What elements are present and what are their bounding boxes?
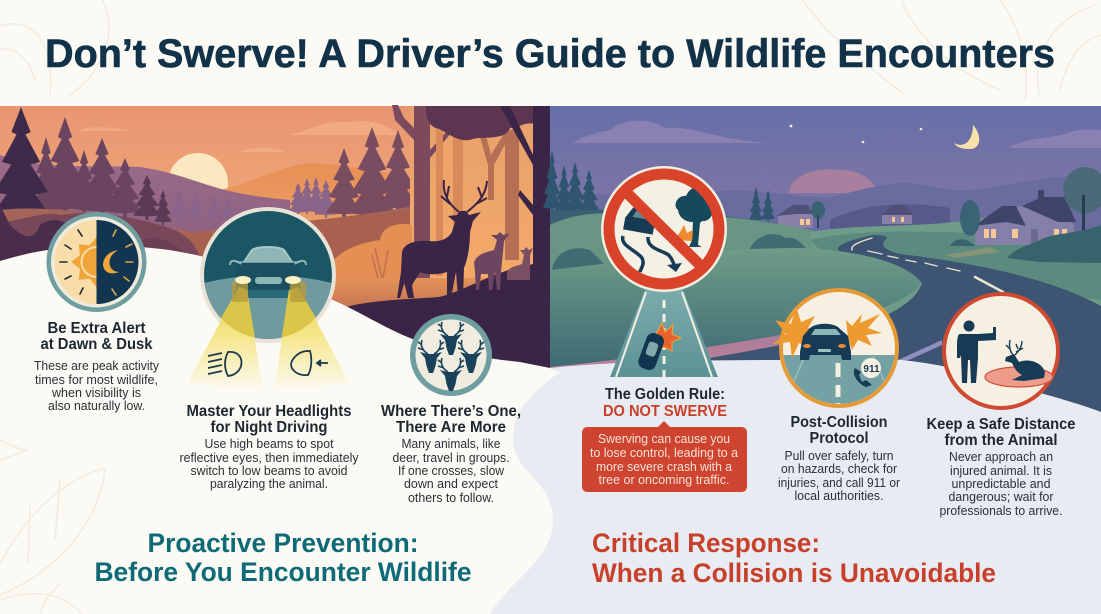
text: safe distance: professionals to arrive. (940, 503, 1062, 518)
text: dawn and dusk: also naturally low. (48, 398, 145, 413)
sun (168, 153, 228, 213)
orange hill (200, 163, 415, 240)
road edge stripe (898, 340, 942, 364)
section heading: critical response: When a Collision is Unavoidable (592, 558, 996, 588)
heading: golden rule: DO NOT SWERVE (603, 403, 727, 420)
text: post-collision: local authorities. (794, 488, 884, 503)
forest pines left (30, 117, 142, 218)
heading: groups (381, 403, 521, 436)
heading: safe distance: Keep a Safe Distance (926, 416, 1076, 433)
heading: golden rule: The Golden Rule: (605, 386, 725, 403)
stars (790, 125, 922, 143)
heading: post-collision: Protocol (810, 430, 868, 447)
explosions (773, 306, 820, 358)
text: groups: If one crosses, slow (398, 463, 505, 478)
text: post-collision (778, 448, 901, 503)
text: groups: Many animals, like (402, 436, 500, 451)
forest trees (392, 105, 452, 278)
text: groups (392, 436, 510, 505)
icon: high beam (208, 352, 242, 376)
text: post-collision: injuries, and call 911 or (778, 475, 901, 490)
icon: low beam (291, 351, 328, 375)
big house (974, 190, 1076, 245)
heading: safe distance (926, 416, 1076, 449)
heading: dawn and dusk: at Dawn & Dusk (40, 336, 153, 353)
left bush hills (0, 213, 200, 258)
big pine (0, 107, 53, 232)
text: safe distance: Never approach an (949, 449, 1053, 464)
resting deer (1005, 340, 1045, 381)
text: groups: down and expect (404, 476, 498, 491)
icon: dawn and dusk clock (46, 212, 146, 312)
tree line (550, 209, 790, 225)
heading: post-collision (790, 414, 888, 447)
text: dawn and dusk: when visibility is (51, 385, 141, 400)
text: safe distance: injured animal. It is (950, 463, 1052, 478)
distant hills (550, 177, 1101, 260)
forest pines right (326, 127, 418, 223)
panel: cream foreground left (0, 246, 560, 614)
lower hills (0, 205, 420, 300)
car (800, 324, 851, 360)
deer silhouettes (397, 180, 533, 298)
heading: golden rule (603, 386, 727, 420)
heading: dawn and dusk: Be Extra Alert (48, 320, 146, 337)
dark foreground hill (320, 262, 551, 372)
skid paths (623, 236, 675, 272)
moon (954, 125, 979, 149)
heading: headlights: Master Your Headlights (186, 403, 352, 420)
clouds (75, 121, 400, 152)
text: safe distance (940, 449, 1062, 518)
car (623, 208, 654, 235)
trees by house (960, 167, 1101, 236)
car (230, 247, 306, 298)
text: headlights: reflective eyes, then immediately (180, 450, 359, 465)
headlamp glow (945, 247, 1000, 258)
panel: dawn forest scene (0, 105, 551, 372)
beams (188, 287, 263, 392)
decorative leaves (0, 0, 1101, 100)
section heading: proactive prevention (94, 528, 472, 587)
big green hill (550, 248, 922, 367)
text: safe distance: dangerous; wait for (948, 489, 1054, 504)
panel: dusk road scene (543, 106, 1101, 425)
icon: post-collision circle: 911 (863, 364, 880, 375)
heading: post-collision: Post-Collision (790, 414, 888, 431)
icon: deer herd circle (410, 314, 492, 396)
heading: dawn and dusk (40, 320, 153, 353)
callout: swerving warning: to lose control, leading to a (590, 445, 739, 460)
bushes (750, 234, 806, 249)
tree (676, 188, 712, 247)
text: headlights: Use high beams to spot (204, 436, 334, 451)
icon: headlights circle (188, 205, 349, 392)
heading: headlights: for Night Driving (210, 419, 328, 436)
text: safe distance: unpredictable and (952, 476, 1050, 491)
text: groups: others to follow. (408, 490, 494, 505)
heading: groups: Where There’s One, (381, 403, 521, 420)
text: post-collision: Pull over safely, turn (784, 448, 894, 463)
distant pines (169, 177, 337, 220)
section heading: proactive prevention: Proactive Prevention: (148, 528, 418, 558)
section heading: critical response: Critical Response: (592, 528, 820, 558)
heading: groups: There Are More (396, 419, 506, 436)
clouds (573, 121, 1101, 148)
dark foreground tree (500, 106, 551, 371)
far pines (543, 150, 775, 223)
decorative leaves lower left (0, 440, 105, 614)
bushes right (1007, 225, 1101, 263)
callout: swerving warning: tree or oncoming traffic. (598, 472, 730, 487)
orange bushes and ground (318, 224, 412, 310)
dark pines (133, 175, 172, 225)
green back hills (550, 213, 850, 300)
text: dawn and dusk: These are peak activity (34, 358, 159, 373)
explosion (678, 225, 693, 241)
callout: swerving warning: Swerving can cause you (598, 431, 730, 446)
purple ridge (0, 155, 290, 260)
section heading: critical response (592, 528, 996, 588)
text: headlights: switch to low beams to avoid (190, 463, 348, 478)
text: groups: deer, travel in groups. (392, 450, 510, 465)
person (957, 320, 996, 383)
heading: headlights (186, 403, 352, 436)
title: Don’t Swerve! A Driver’s Guide to Wildlife Encounters (45, 32, 1055, 76)
icon: no swerve sign (601, 166, 727, 292)
road dashes (852, 238, 1003, 292)
phone 911 (861, 358, 881, 378)
callout: swerving warning (582, 421, 747, 492)
icon: post-collision circle (773, 288, 900, 412)
icon: golden rule road (610, 290, 718, 377)
text: post-collision: on hazards, check for (781, 461, 898, 476)
text: headlights (180, 436, 359, 491)
houses (776, 201, 913, 228)
text: dawn and dusk (34, 358, 159, 413)
road (650, 235, 1101, 425)
forest backdrop (410, 106, 540, 286)
section heading: proactive prevention: Before You Encounter Wildlife (94, 557, 472, 587)
icon: safe distance circle (942, 292, 1060, 410)
text: dawn and dusk: times for most wildlife, (35, 372, 158, 387)
heading: safe distance: from the Animal (944, 432, 1058, 449)
tree canopy (426, 106, 538, 140)
callout: swerving warning: more severe crash with a (596, 459, 733, 474)
text: headlights: paralyzing the animal. (210, 476, 328, 491)
panel: lavender foreground right (490, 358, 1101, 614)
